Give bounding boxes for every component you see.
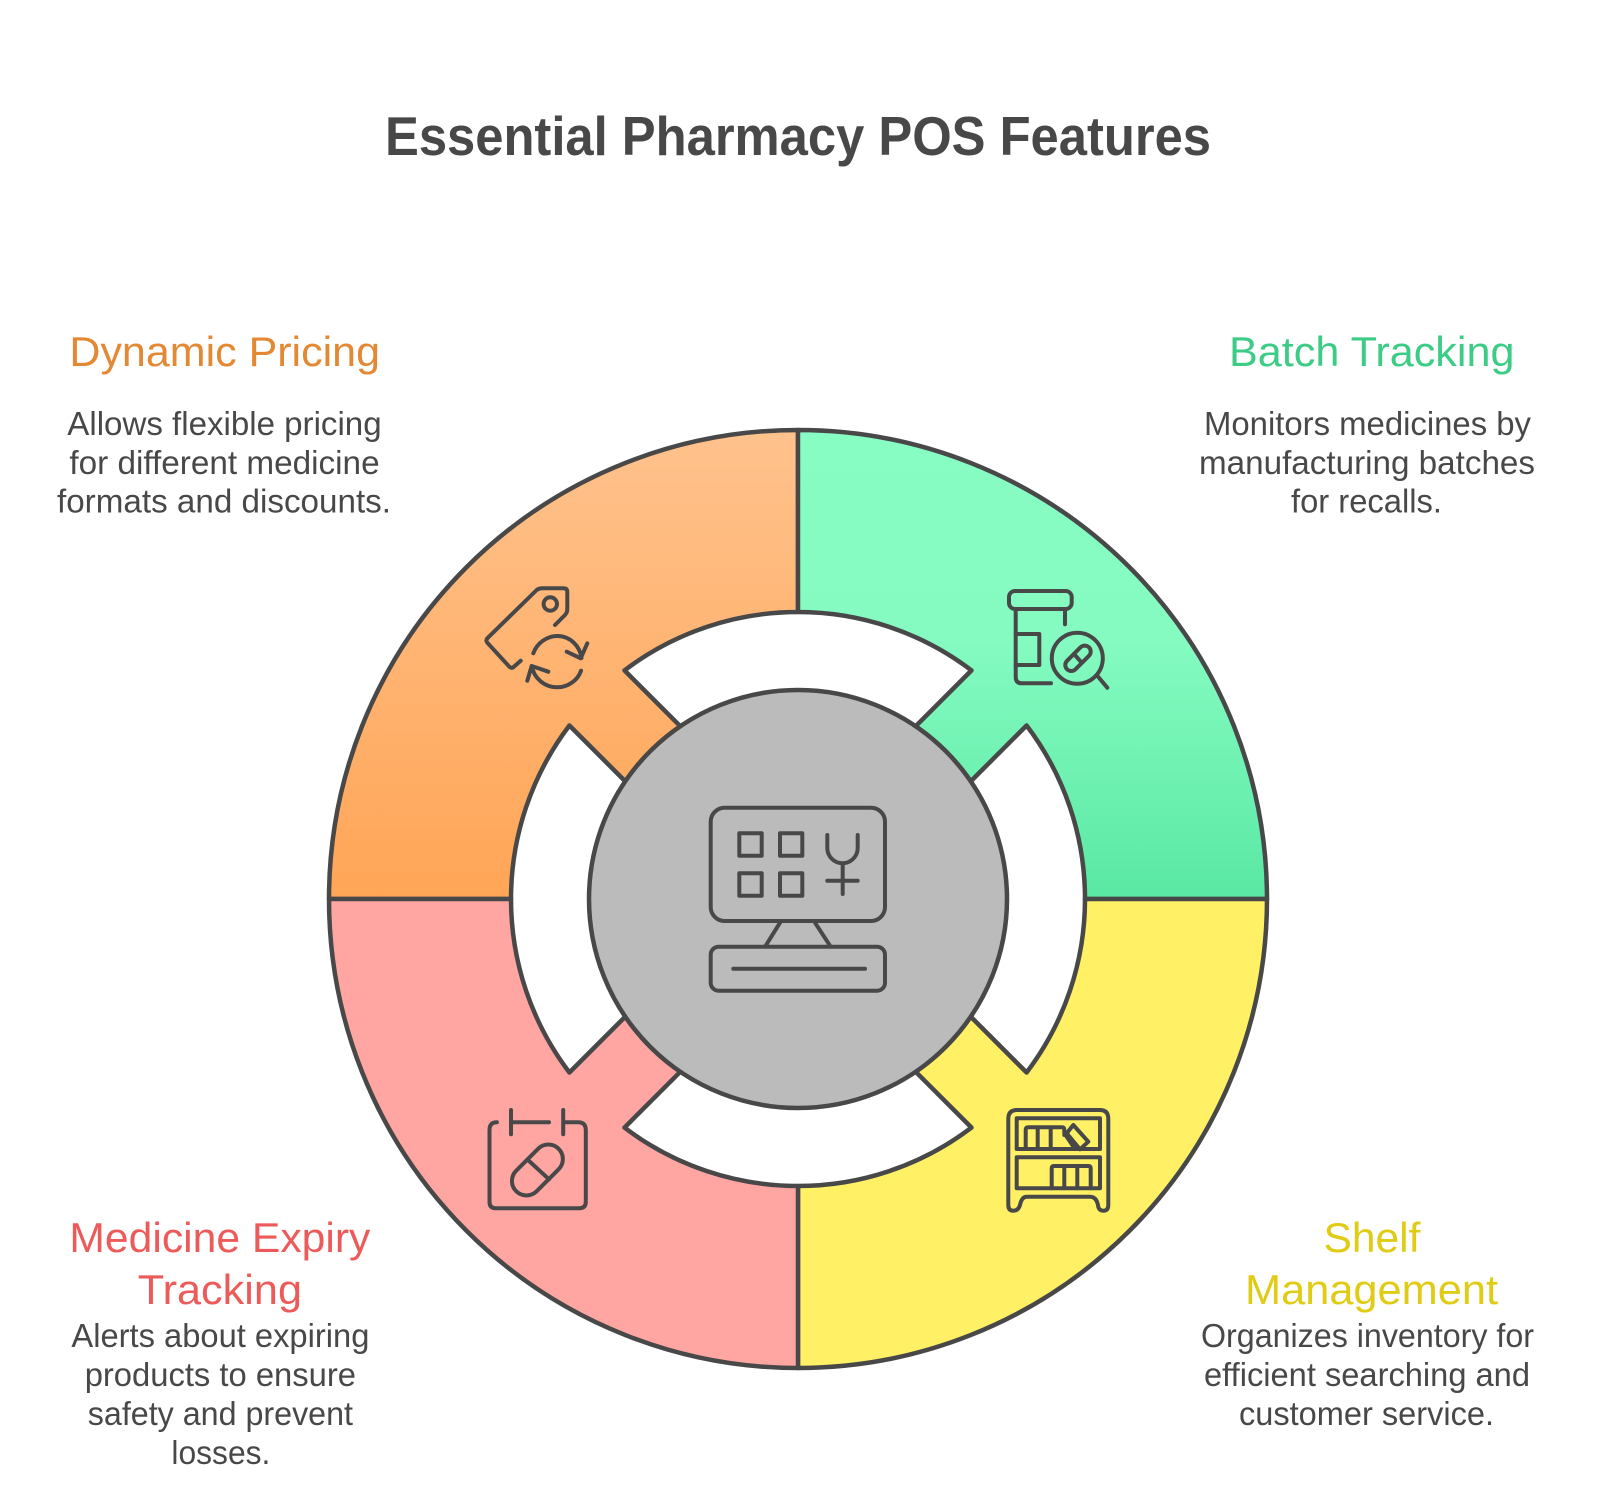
icon: POS monitor and keyboard <box>711 808 885 991</box>
description: medicine expiry tracking: products to ensure <box>85 1356 356 1393</box>
description: shelf management: Organizes inventory for <box>1201 1317 1534 1354</box>
description: dynamic pricing: for different medicine <box>69 444 380 481</box>
description: dynamic pricing <box>57 405 391 520</box>
description: medicine expiry tracking <box>71 1317 369 1471</box>
description: batch tracking: for recalls. <box>1291 483 1442 520</box>
icon: pill bottle with magnifier <box>1009 591 1107 688</box>
heading: shelf management: Management <box>1245 1266 1498 1313</box>
heading: medicine expiry tracking: Tracking <box>138 1266 302 1313</box>
description: medicine expiry tracking: Alerts about expiring <box>71 1317 369 1354</box>
heading: batch tracking: Batch Tracking <box>1229 328 1514 375</box>
description: dynamic pricing: Allows flexible pricing <box>67 405 382 442</box>
description: batch tracking: Monitors medicines by <box>1204 405 1531 442</box>
description: dynamic pricing: formats and discounts. <box>57 483 391 520</box>
title: Essential Pharmacy POS Features <box>385 105 1211 167</box>
icon: price tag with cycle arrows <box>486 588 587 687</box>
panel: batch tracking segment <box>798 430 1267 899</box>
text block: shelf management <box>1201 1214 1534 1432</box>
heading: shelf management: Shelf <box>1324 1214 1421 1261</box>
description: shelf management: customer service. <box>1239 1395 1494 1432</box>
description: shelf management <box>1201 1317 1534 1432</box>
text block: dynamic pricing <box>57 328 391 520</box>
heading: medicine expiry tracking: Medicine Expiry <box>69 1214 370 1261</box>
heading: medicine expiry tracking <box>69 1214 370 1313</box>
description: batch tracking: manufacturing batches <box>1199 444 1535 481</box>
heading: dynamic pricing: Dynamic Pricing <box>69 328 380 375</box>
panel: medicine expiry segment <box>329 899 798 1368</box>
description: batch tracking <box>1199 405 1535 520</box>
description: medicine expiry tracking: safety and prevent <box>88 1395 353 1432</box>
center circle <box>589 690 1007 1108</box>
description: shelf management: efficient searching and <box>1204 1356 1530 1393</box>
text block: medicine expiry tracking <box>69 1214 370 1471</box>
icon: calendar with capsule <box>490 1110 586 1208</box>
panel: dynamic pricing segment <box>329 430 798 899</box>
description: medicine expiry tracking: losses. <box>171 1434 270 1471</box>
heading: shelf management <box>1245 1214 1498 1313</box>
icon: medicine shelf <box>1008 1110 1108 1211</box>
text block: batch tracking <box>1199 328 1535 520</box>
panel: shelf management segment <box>798 899 1267 1368</box>
